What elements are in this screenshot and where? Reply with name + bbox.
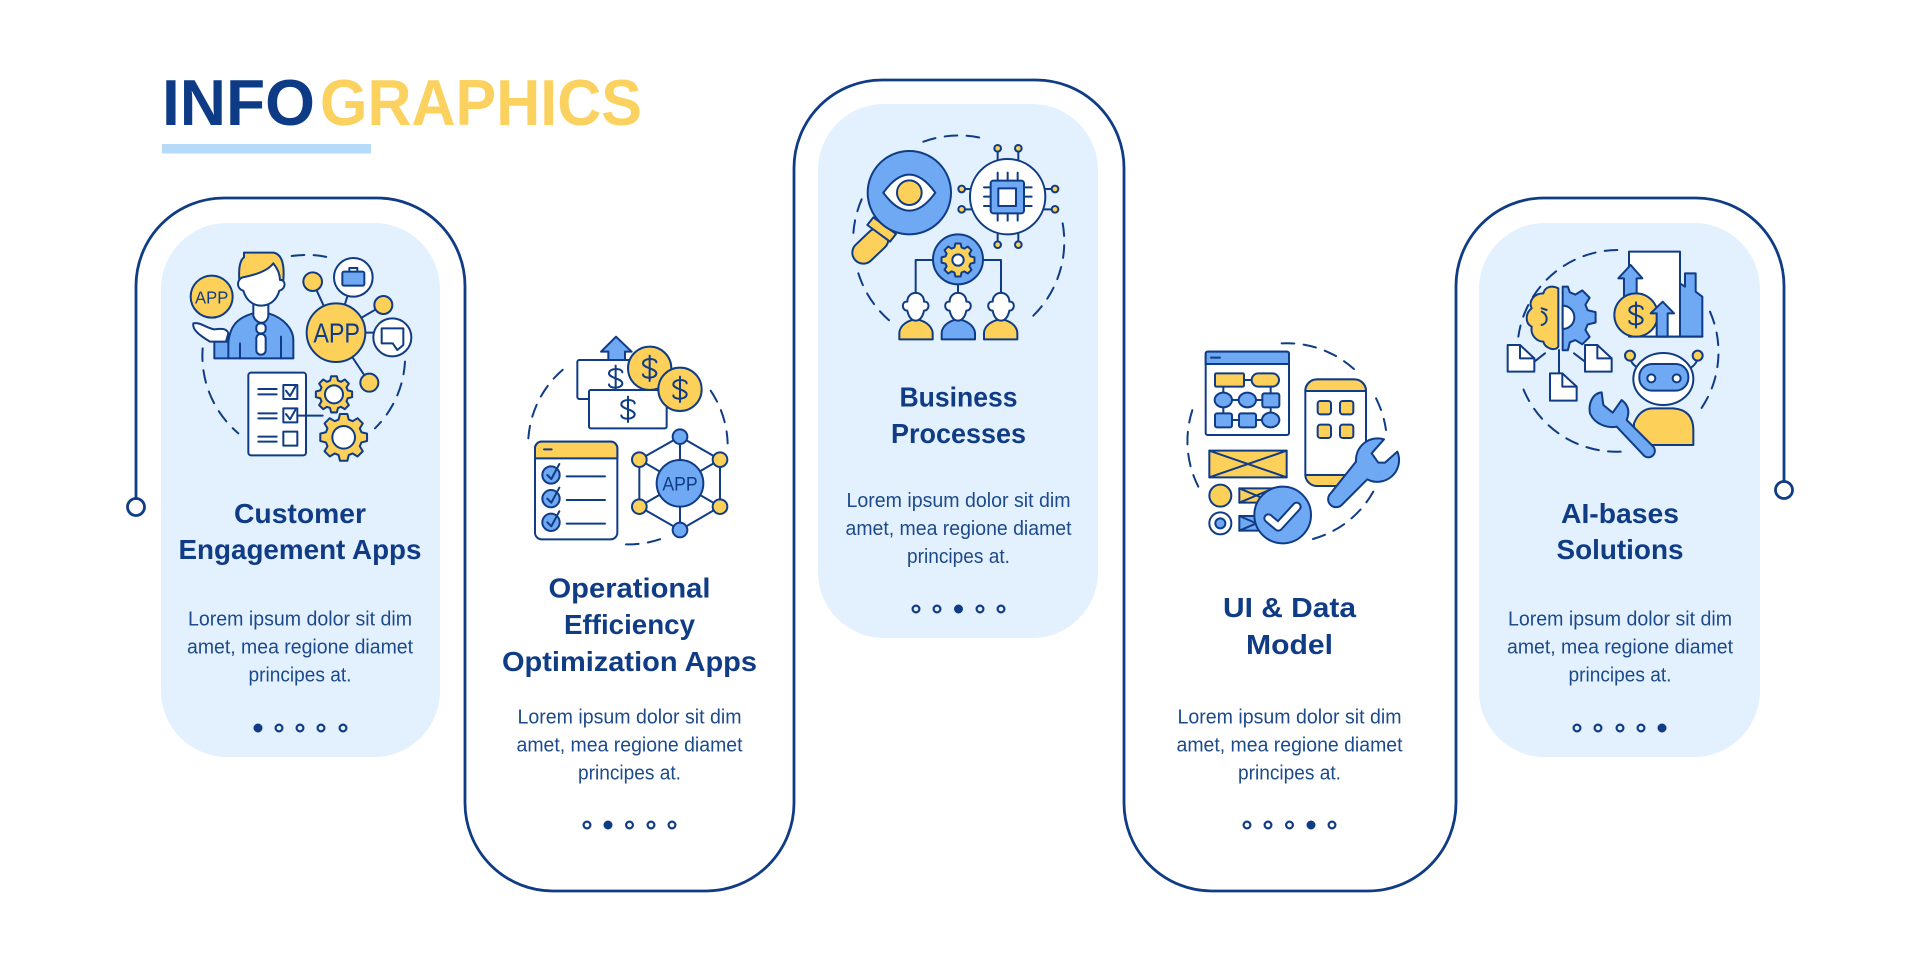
icon: money and app network — [528, 337, 728, 544]
icon: money and app network: APP — [662, 474, 698, 495]
panel: business processes — [818, 104, 1098, 638]
body text — [846, 490, 1072, 568]
body text: principes at. — [248, 664, 352, 686]
heading — [1556, 498, 1684, 565]
heading — [1223, 592, 1356, 660]
body text — [1507, 608, 1733, 686]
heading: Processes — [891, 418, 1026, 449]
body text: Lorem ipsum dolor sit dim — [1508, 608, 1732, 630]
body text: amet, mea regione diamet — [187, 636, 413, 658]
pagination dots — [255, 725, 346, 731]
panel: customer engagement apps — [161, 223, 440, 757]
heading: Model — [1246, 629, 1333, 660]
heading: UI & Data — [1223, 592, 1356, 623]
title underline — [162, 144, 371, 154]
icon: customer with app: APP — [313, 318, 360, 349]
panel background — [1479, 223, 1760, 757]
body text: Lorem ipsum dolor sit dim — [1178, 706, 1402, 728]
body text: principes at. — [578, 762, 681, 784]
panel: operational efficiency optimization apps — [502, 337, 757, 828]
heading: Business — [900, 382, 1018, 412]
icon: customer with app: APP — [195, 287, 228, 307]
body text: principes at. — [907, 546, 1010, 568]
body text: amet, mea regione diamet — [1176, 734, 1403, 756]
title — [162, 66, 642, 139]
panel background — [818, 104, 1098, 638]
panel: ai-bases solutions — [1479, 223, 1760, 757]
heading — [502, 572, 757, 677]
heading — [891, 382, 1026, 449]
title: INFO — [162, 66, 315, 139]
icon: ai brain, growth and robot — [1508, 250, 1718, 457]
heading: Engagement Apps — [178, 534, 422, 565]
heading: Operational — [548, 572, 710, 604]
body text: Lorem ipsum dolor sit dim — [188, 608, 412, 630]
icon: wireframes and phone — [1187, 343, 1399, 543]
connector outline — [128, 80, 1792, 891]
heading: Optimization Apps — [502, 646, 757, 677]
pagination dots — [913, 606, 1004, 612]
body text: principes at. — [1238, 762, 1341, 784]
body text — [1176, 706, 1403, 784]
heading: AI-bases — [1561, 498, 1679, 529]
body text: amet, mea regione diamet — [1507, 636, 1733, 658]
title: GRAPHICS — [320, 66, 642, 139]
body text — [516, 706, 743, 784]
body text: Lorem ipsum dolor sit dim — [846, 490, 1070, 512]
pagination dots — [584, 822, 675, 828]
panel: ui and data model — [1176, 343, 1403, 828]
icon: magnifier, chip and team — [853, 135, 1064, 339]
body text: principes at. — [1568, 664, 1672, 686]
panel background — [161, 223, 440, 757]
body text: amet, mea regione diamet — [516, 734, 743, 756]
pagination dots — [1244, 822, 1335, 828]
body text — [187, 608, 413, 686]
pagination dots — [1574, 725, 1665, 731]
heading: Solutions — [1556, 534, 1684, 565]
body text: Lorem ipsum dolor sit dim — [518, 706, 742, 728]
icon: customer with app — [191, 253, 411, 461]
heading: Efficiency — [564, 609, 695, 640]
heading: Customer — [234, 498, 366, 529]
heading — [178, 498, 422, 565]
body text: amet, mea regione diamet — [846, 518, 1072, 540]
